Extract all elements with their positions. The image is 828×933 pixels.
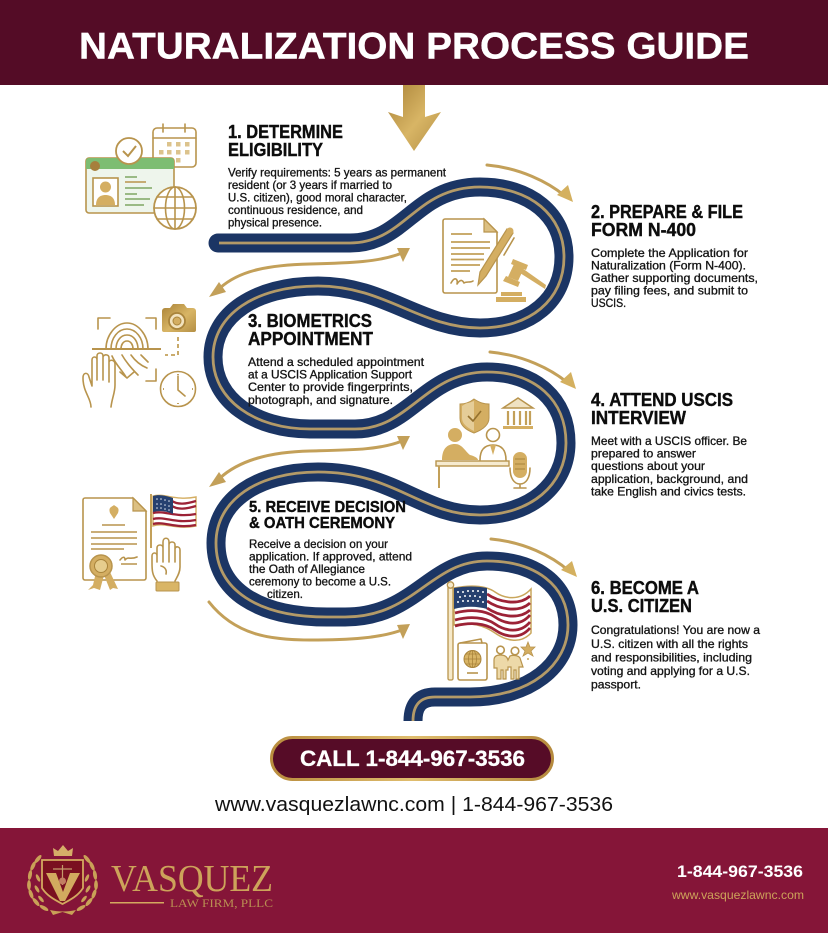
winding road path — [208, 187, 568, 721]
icon: eligibility card, calendar, globe — [86, 124, 196, 229]
courthouse — [503, 398, 533, 429]
step 3: biometrics appointment — [248, 311, 425, 407]
arrow: step 5 loop to flag — [209, 602, 410, 640]
step 6 body text — [591, 623, 760, 692]
step 4 body text: application, background, and — [591, 472, 748, 486]
step 6 heading: 6. BECOME A — [591, 578, 699, 598]
step 2 body text: USCIS. — [591, 296, 626, 310]
check badge — [116, 138, 142, 164]
step 2 body text: Complete the Application for — [591, 246, 748, 260]
desk — [436, 461, 509, 488]
family — [494, 646, 523, 679]
id card — [86, 158, 174, 213]
footer phone: 1-844-967-3536 — [677, 862, 803, 881]
arrow: top entry — [388, 85, 441, 151]
step 4 heading — [591, 390, 733, 428]
step 2 heading: FORM N-400 — [591, 220, 696, 240]
step 3 body text: Center to provide fingerprints, — [248, 380, 413, 394]
camera — [162, 304, 196, 332]
title: NATURALIZATION PROCESS GUIDE — [79, 24, 749, 66]
logo wordmark: VASQUEZ — [111, 858, 273, 900]
icon: document, pen and gavel — [443, 219, 546, 302]
step 2: prepare and file form — [591, 202, 758, 310]
step 2 body text: Gather supporting documents, — [591, 271, 758, 285]
step 1 heading: ELIGIBILITY — [228, 140, 323, 160]
step 5 body text: the Oath of Allegiance — [249, 562, 365, 576]
step 6 body text: and responsibilities, including — [591, 650, 752, 664]
icon: flag, passport, family — [447, 582, 535, 680]
step 6 body text: U.S. citizen with all the rights — [591, 637, 748, 651]
step 1 body text: continuous residence, and — [228, 203, 363, 217]
arrow: step 1 to 2 — [487, 165, 573, 202]
american flag small — [151, 494, 196, 548]
step 1: determine eligibility — [228, 122, 447, 230]
arrow: step 5 to 6 — [491, 539, 577, 577]
step 4 body text: take English and civics tests. — [591, 484, 746, 498]
step 2 body text: pay filing fees, and submit to — [591, 284, 748, 298]
logo: law firm emblem — [27, 845, 273, 915]
step 1 body text: U.S. citizen), good moral character, — [228, 191, 407, 205]
step 6 heading: U.S. CITIZEN — [591, 596, 692, 616]
step 2 heading: 2. PREPARE & FILE — [591, 202, 743, 222]
large american flag — [447, 582, 531, 680]
passport — [458, 639, 487, 680]
crown — [53, 845, 73, 856]
certificate — [83, 498, 146, 590]
calendar — [153, 124, 196, 167]
gavel — [496, 259, 546, 302]
step 5 body text: ceremony to become a U.S. — [249, 574, 391, 588]
step 2 body text: Naturalization (Form N-400). — [591, 258, 746, 272]
clock — [160, 372, 196, 406]
step 3 body text: Attend a scheduled appointment — [248, 355, 425, 369]
step 6 body text: Congratulations! You are now a — [591, 623, 760, 637]
pen — [478, 228, 514, 285]
step 1 heading — [228, 122, 343, 160]
document — [443, 219, 497, 293]
step 5 body text: Receive a decision on your — [249, 537, 388, 551]
call button: CALL 1-844-967-3536 — [300, 746, 525, 771]
microphone — [510, 452, 530, 488]
icon: certificate, flag, raised hand — [83, 494, 196, 591]
call button — [272, 738, 552, 780]
step 3 body text: photograph, and signature. — [248, 393, 393, 407]
icon: interview desk, shield, building, microphone — [436, 398, 533, 488]
step 1 heading: 1. DETERMINE — [228, 122, 343, 142]
step 6 body text: voting and applying for a U.S. — [591, 664, 750, 678]
step 5 heading: 5. RECEIVE DECISION — [249, 499, 406, 516]
footer band — [0, 828, 828, 933]
step 6: become a citizen — [591, 578, 760, 692]
step 6 heading — [591, 578, 699, 616]
step 2 body text — [591, 246, 758, 310]
footer website: www.vasquezlawnc.com — [671, 888, 804, 902]
step 1 body text — [228, 166, 447, 230]
step 5 body text — [249, 537, 412, 601]
icon: fingerprint, camera, clock — [83, 304, 196, 407]
shield — [460, 399, 489, 433]
step 4: attend uscis interview — [591, 390, 748, 498]
step 2 heading — [591, 202, 743, 240]
star — [521, 642, 535, 660]
arrow: step 2 to 3 — [209, 248, 410, 297]
step 6 body text: passport. — [591, 678, 641, 692]
step 5: receive decision and oath — [249, 499, 412, 601]
step 3 body text: at a USCIS Application Support — [248, 368, 413, 382]
logo wordmark: LAW FIRM, PLLC — [170, 896, 273, 910]
header banner — [0, 0, 828, 85]
step 3 heading: APPOINTMENT — [248, 329, 373, 349]
step 3 heading: 3. BIOMETRICS — [248, 311, 372, 331]
step 4 body text — [591, 434, 748, 498]
step 3 heading — [248, 311, 373, 349]
arrow: step 3 to 4 — [490, 352, 576, 389]
raised hand — [152, 538, 180, 591]
shield — [42, 860, 83, 904]
step 4 body text: questions about your — [591, 459, 705, 473]
fingerprint scanner — [92, 318, 161, 381]
step 5 body text: application. If approved, attend — [249, 550, 412, 564]
step 1 body text: physical presence. — [228, 216, 322, 230]
hand — [83, 353, 115, 407]
step 4 heading: INTERVIEW — [591, 408, 686, 428]
dashed connector — [165, 337, 178, 355]
step 5 body text: citizen. — [267, 587, 303, 601]
step 3 body text — [248, 355, 425, 407]
officer — [480, 428, 506, 460]
laurel wreath — [27, 854, 98, 915]
step 4 body text: prepared to answer — [591, 446, 696, 460]
step 4 heading: 4. ATTEND USCIS — [591, 390, 733, 410]
step 5 heading — [249, 499, 406, 532]
step 1 body text: resident (or 3 years if married to — [228, 178, 392, 192]
website and phone line: www.vasquezlawnc.com | 1-844-967-3536 — [214, 794, 613, 816]
applicant — [442, 428, 478, 460]
step 4 body text: Meet with a USCIS officer. Be — [591, 434, 747, 448]
step 5 heading: & OATH CEREMONY — [249, 515, 395, 532]
step 1 body text: Verify requirements: 5 years as permanent — [228, 166, 447, 180]
globe — [154, 187, 196, 229]
arrow: step 4 to 5 — [209, 436, 410, 487]
